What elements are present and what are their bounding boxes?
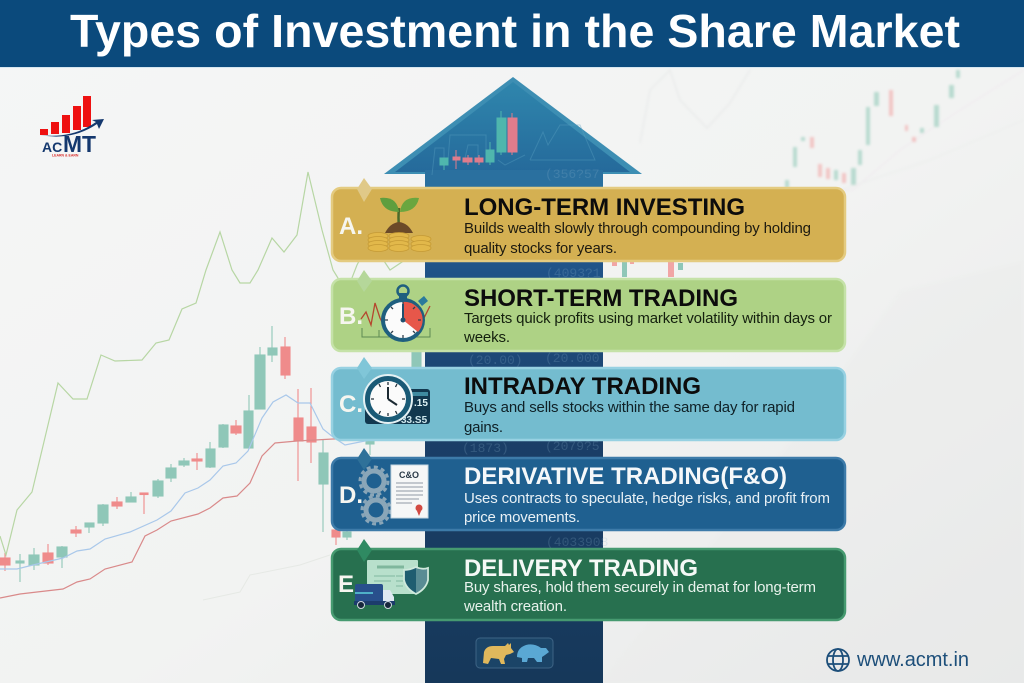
icon: clock with ticker bbox=[364, 375, 430, 426]
card D text: DERIVATIVE TRADING(F&O) bbox=[464, 463, 787, 490]
blurred background chart: top right bbox=[640, 70, 1024, 190]
card D text: price movements. bbox=[464, 509, 580, 526]
letter B: B. bbox=[339, 303, 363, 330]
faint shaft numerals: (2079?5 bbox=[545, 439, 600, 454]
bear bbox=[517, 644, 549, 662]
card A: long-term investing bbox=[332, 178, 845, 261]
card D text: Uses contracts to speculate, hedge risks, and profit from bbox=[464, 490, 830, 507]
faint shaft numerals bbox=[462, 167, 608, 550]
arrow head bbox=[384, 77, 642, 190]
icon: clock with ticker: .15 bbox=[414, 398, 428, 409]
bull bbox=[483, 643, 514, 664]
card B text: weeks. bbox=[463, 329, 510, 346]
card C text: INTRADAY TRADING bbox=[464, 373, 701, 400]
card A text bbox=[464, 194, 811, 257]
title: Types of Investment in the Share Market bbox=[70, 5, 960, 57]
logo: ACMT: LEARN & EARN bbox=[52, 154, 79, 158]
header bar bbox=[0, 0, 1024, 68]
icon: gears and contract bbox=[360, 465, 428, 524]
logo: ACMT: AC bbox=[42, 139, 62, 155]
card B text: SHORT-TERM TRADING bbox=[464, 285, 738, 312]
faint shaft numerals: (20.000 bbox=[545, 351, 600, 366]
card C text bbox=[464, 373, 795, 436]
icon: gears and contract: C&O bbox=[399, 470, 419, 480]
card D text bbox=[464, 463, 830, 526]
card C: intraday trading bbox=[332, 357, 845, 440]
card E text: wealth creation. bbox=[463, 598, 567, 615]
icon: certificate, shield and truck bbox=[354, 560, 428, 608]
card C text: Buys and sells stocks within the same day for rapid bbox=[464, 399, 795, 416]
letter A: A. bbox=[339, 213, 363, 240]
logo: ACMT bbox=[40, 96, 104, 158]
logo: ACMT: MT bbox=[63, 131, 96, 157]
card E: delivery trading bbox=[332, 539, 845, 620]
card A text: Builds wealth slowly through compounding by holding bbox=[464, 220, 811, 237]
arrow chart motif bbox=[432, 111, 595, 175]
arrow shaft bbox=[425, 172, 603, 683]
card B: short-term trading bbox=[332, 270, 845, 351]
bull and bear badge bbox=[476, 638, 553, 668]
card D: derivative trading bbox=[332, 448, 845, 530]
icon: plant on coins bbox=[368, 198, 431, 252]
icon: globe bbox=[827, 649, 849, 671]
card B text: Targets quick profits using market volatility within days or bbox=[464, 310, 832, 327]
faint shaft numerals: (4093?1 bbox=[546, 266, 601, 281]
card E text: DELIVERY TRADING bbox=[464, 555, 698, 582]
letter D: D. bbox=[339, 482, 363, 509]
faint shaft numerals: (356?57 bbox=[545, 167, 600, 182]
card A text: quality stocks for years. bbox=[464, 240, 617, 257]
website link: www.acmt.in bbox=[856, 649, 969, 671]
faint shaft numerals: (4033908 bbox=[546, 535, 608, 550]
icon: stopwatch over chart bbox=[361, 286, 430, 340]
card E text: Buy shares, hold them securely in demat for long-term bbox=[464, 579, 816, 596]
card C text: gains. bbox=[464, 419, 503, 436]
card B text bbox=[463, 285, 832, 346]
upward arrow bbox=[384, 77, 642, 683]
candlestick chart with moving averages bbox=[0, 172, 683, 600]
letter C: C. bbox=[339, 391, 363, 418]
card E text bbox=[463, 555, 816, 615]
faint shaft numerals: (1873) bbox=[462, 441, 509, 456]
icon: clock with ticker: 33.S5 bbox=[401, 415, 428, 426]
letter E: E. bbox=[338, 571, 361, 598]
card A text: LONG-TERM INVESTING bbox=[464, 194, 745, 221]
faint shaft numerals: (20.00) bbox=[468, 353, 523, 368]
